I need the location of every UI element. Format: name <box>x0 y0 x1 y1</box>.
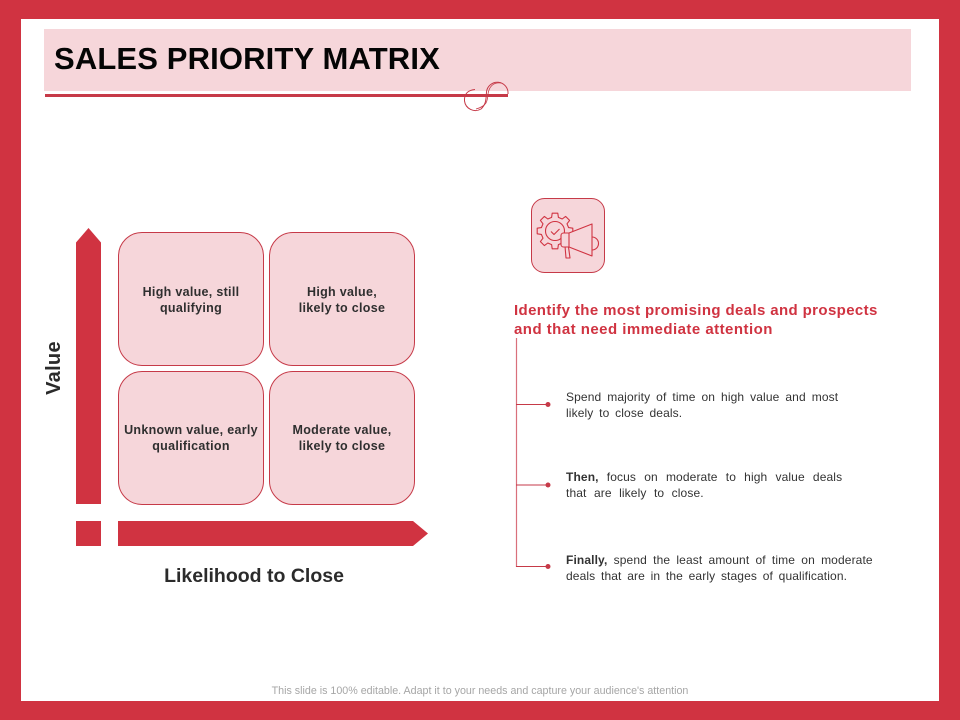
axis corner square <box>76 521 101 546</box>
value axis label: Value <box>43 341 65 394</box>
quadrant: high value, still qualifying <box>118 232 264 366</box>
callout heading <box>514 302 878 338</box>
quadrant: moderate value, likely to close: likely to close <box>299 439 385 453</box>
quadrant: unknown value, early qualification: Unknown value, early <box>124 423 258 437</box>
value axis arrow <box>76 228 101 504</box>
bullet connector tree <box>516 338 550 569</box>
footer note: This slide is 100% editable. Adapt it to your needs and capture your audience's attention <box>272 684 688 696</box>
quadrant: unknown value, early qualification: qualification <box>152 439 230 453</box>
quadrant: high value, likely to close: likely to close <box>299 301 385 315</box>
bullet text: least time: deals that are in the early stages of qualification. <box>566 569 847 583</box>
callout heading: and that need immediate attention <box>514 321 773 338</box>
likelihood axis arrow <box>118 521 428 546</box>
callout heading: Identify the most promising deals and prospects <box>514 302 878 319</box>
bullet text: moderate to high <box>566 470 842 500</box>
bullet text: high value: Spend majority of time on high value and most <box>566 390 838 404</box>
quadrant: high value, likely to close: High value, <box>307 285 377 299</box>
quadrant: moderate value, likely to close: Moderate value, <box>292 423 391 437</box>
bullet text: least time: Finally, spend the least amount of time on moderate <box>566 553 873 567</box>
title band <box>44 29 911 91</box>
quadrant: high value, likely to close <box>269 232 415 366</box>
quadrant: high value, still qualifying: High value, still <box>143 285 239 299</box>
quadrant: unknown value, early qualification <box>118 371 264 505</box>
bullet text: moderate to high: Then, focus on moderate to high value deals <box>566 470 842 484</box>
bullet text: high value <box>566 390 838 420</box>
icon: gear and megaphone <box>531 198 605 273</box>
bullet text: least time <box>566 553 873 583</box>
bullet text: high value: likely to close deals. <box>566 406 682 420</box>
title underline with flourish <box>45 82 509 112</box>
likelihood axis label: Likelihood to Close <box>164 564 344 586</box>
title: SALES PRIORITY MATRIX <box>54 41 440 76</box>
quadrant: high value, still qualifying: qualifying <box>160 301 222 315</box>
quadrant: moderate value, likely to close <box>269 371 415 505</box>
bullet text: moderate to high: that are likely to close. <box>566 486 704 500</box>
